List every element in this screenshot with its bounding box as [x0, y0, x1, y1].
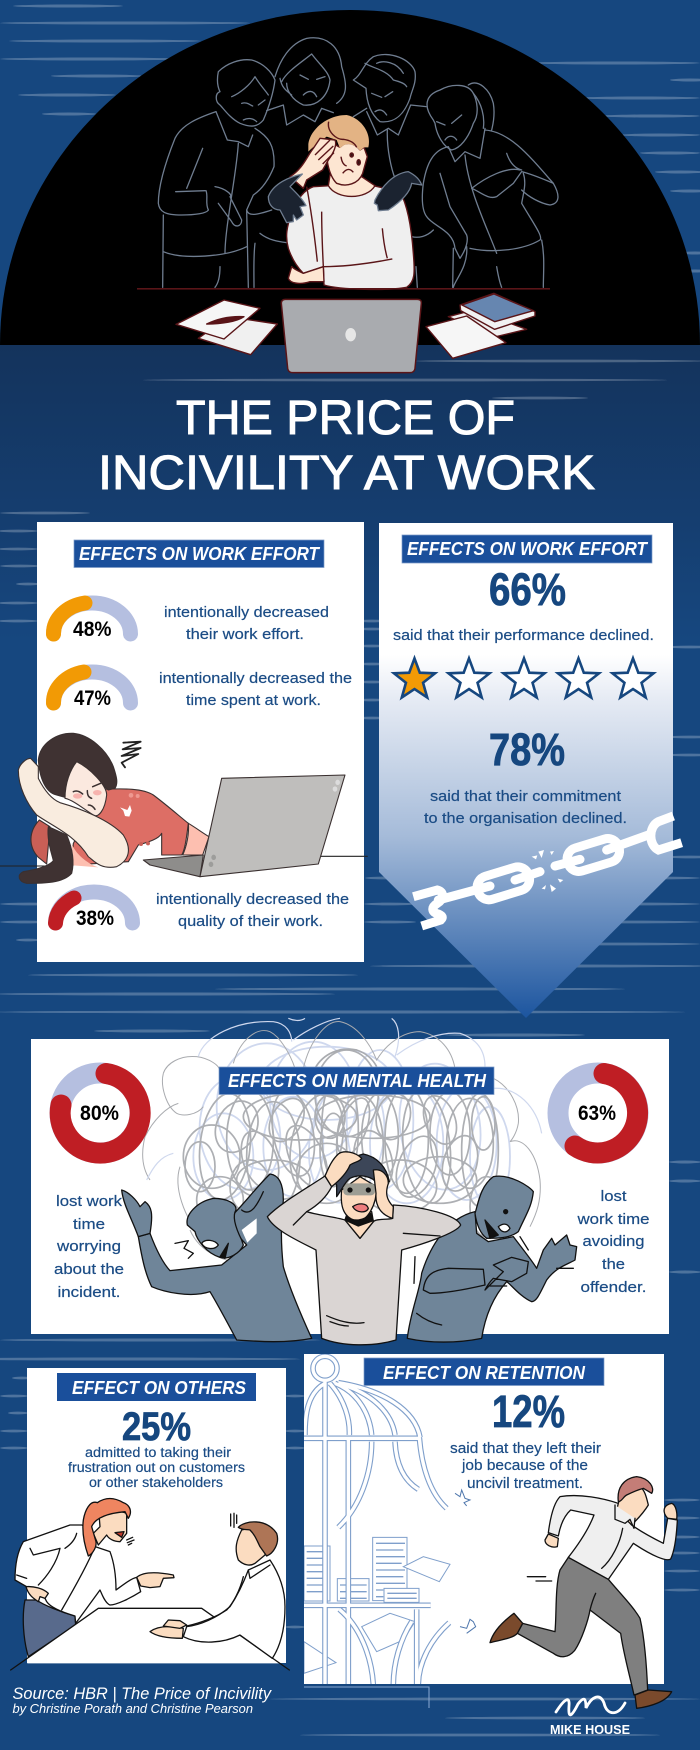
text: worrying: lost work: [56, 1194, 123, 1210]
text: performance declined: said that their performance declined.: [393, 628, 654, 644]
text: left their job: uncivil treatment.: [467, 1476, 583, 1492]
title: INCIVILITY AT WORK: [98, 447, 595, 500]
text: frustration: [68, 1445, 245, 1490]
scolding woman: [15, 1498, 174, 1657]
illustration: three anxious men: [122, 1152, 577, 1345]
source credit: Source: HBR | The Price of Incivility: [12, 1684, 272, 1703]
gauge 47%: 47%: [74, 687, 111, 710]
hero illustration: dome with stressed worker surrounded by colleagues: [0, 10, 700, 373]
laptop: [281, 299, 421, 373]
heading: [219, 1067, 494, 1094]
central man: [267, 1152, 461, 1345]
gauge 47%: [53, 672, 130, 710]
source credit: by Christine Porath and Christine Pearson: [12, 1701, 253, 1716]
text: worrying: worrying: [56, 1239, 121, 1255]
text: avoiding: [576, 1189, 650, 1296]
logo: Mike House: [550, 1697, 630, 1737]
text: quality of work: [156, 892, 349, 930]
stat 78%: 78%: [489, 724, 565, 775]
text: quality of work: quality of their work.: [178, 914, 323, 930]
papers and books on desk: [176, 293, 535, 358]
text: commitment declined: said that their commitment: [430, 789, 621, 805]
cage base line: [304, 1687, 429, 1708]
outlined colleagues: [158, 38, 558, 287]
left shadow figure: [122, 1174, 312, 1342]
panel: effect on others: [27, 1368, 286, 1663]
text: work effort: [164, 605, 329, 643]
stat 66%: 66%: [489, 564, 566, 615]
text: commitment declined: to the organisation declined.: [424, 811, 627, 827]
text: work effort: intentionally decreased: [164, 605, 329, 621]
panel: effect on retention: [304, 1354, 664, 1708]
heading: EFFECTS ON WORK EFFORT: [407, 539, 649, 559]
heading: [74, 540, 324, 568]
panel: effects on work effort (arrow banner): [379, 523, 682, 1018]
text: frustration: or other stakeholders: [89, 1475, 223, 1490]
illustration: man running away: [490, 1477, 677, 1708]
stat 12%: 12%: [492, 1386, 565, 1437]
donut 80%: [60, 1073, 140, 1153]
text: time at work: time spent at work.: [186, 693, 321, 709]
panel: effects on mental health: [31, 1018, 669, 1334]
text: avoiding: lost: [600, 1189, 626, 1205]
text: worrying: [54, 1194, 124, 1301]
stat 25%: 25%: [122, 1405, 191, 1449]
text: avoiding: offender.: [580, 1280, 646, 1296]
logo: Mike House: MIKE HOUSE: [550, 1722, 630, 1737]
star rating: [394, 658, 654, 697]
text: left their job: job because of the: [461, 1458, 588, 1474]
heading: EFFECT ON RETENTION: [383, 1363, 586, 1383]
panel: effects on work effort (gauges): [37, 522, 364, 962]
title: THE PRICE OF: [176, 392, 515, 445]
heading: [57, 1373, 256, 1401]
text: avoiding: avoiding: [582, 1234, 644, 1250]
heading: EFFECT ON OTHERS: [72, 1378, 246, 1398]
text: frustration: admitted to taking their: [85, 1445, 232, 1460]
source credit: [12, 1684, 272, 1716]
text: left their job: said that they left their: [450, 1441, 601, 1457]
stressed worker in white sweater: [287, 115, 414, 289]
donut 63%: 63%: [578, 1102, 616, 1125]
scribble cloud: [143, 1018, 542, 1263]
text: left their job: [450, 1441, 601, 1492]
donut 80%: 80%: [80, 1102, 119, 1125]
text: avoiding: work time: [576, 1212, 650, 1228]
text: frustration: frustration out on customers: [68, 1460, 245, 1475]
heading: [402, 535, 652, 563]
table line: [137, 288, 550, 290]
table: [11, 1608, 289, 1670]
text: time at work: [159, 671, 352, 709]
title: [98, 392, 595, 500]
right shadow figure: [407, 1176, 577, 1342]
illustration: manager scolding employee across table: [11, 1498, 289, 1670]
text: time at work: intentionally decreased the: [159, 671, 352, 687]
text: work effort: their work effort.: [186, 627, 304, 643]
heading: EFFECTS ON WORK EFFORT: [79, 544, 321, 564]
gauge 48%: [53, 603, 130, 641]
dark hands on shoulders: [268, 172, 422, 223]
gauge 38%: 38%: [76, 907, 114, 930]
gauge 48%: 48%: [73, 618, 112, 641]
text: avoiding: the: [602, 1257, 625, 1273]
text: worrying: about the: [54, 1262, 124, 1278]
heading: EFFECTS ON MENTAL HEALTH: [228, 1071, 487, 1091]
gauge 38%: [56, 892, 132, 930]
seated man: [150, 1513, 285, 1658]
text: worrying: incident.: [58, 1285, 120, 1301]
text: worrying: time: [73, 1217, 105, 1233]
text: quality of work: intentionally decreased the: [156, 892, 349, 908]
birdcage illustration: [304, 1356, 476, 1685]
icon: broken chain: [413, 816, 682, 926]
heading: [364, 1358, 604, 1386]
donut 63%: [558, 1073, 638, 1153]
illustration: exhausted woman at laptop: [0, 733, 367, 883]
black dome: [0, 10, 700, 345]
text: commitment declined: [424, 789, 627, 827]
